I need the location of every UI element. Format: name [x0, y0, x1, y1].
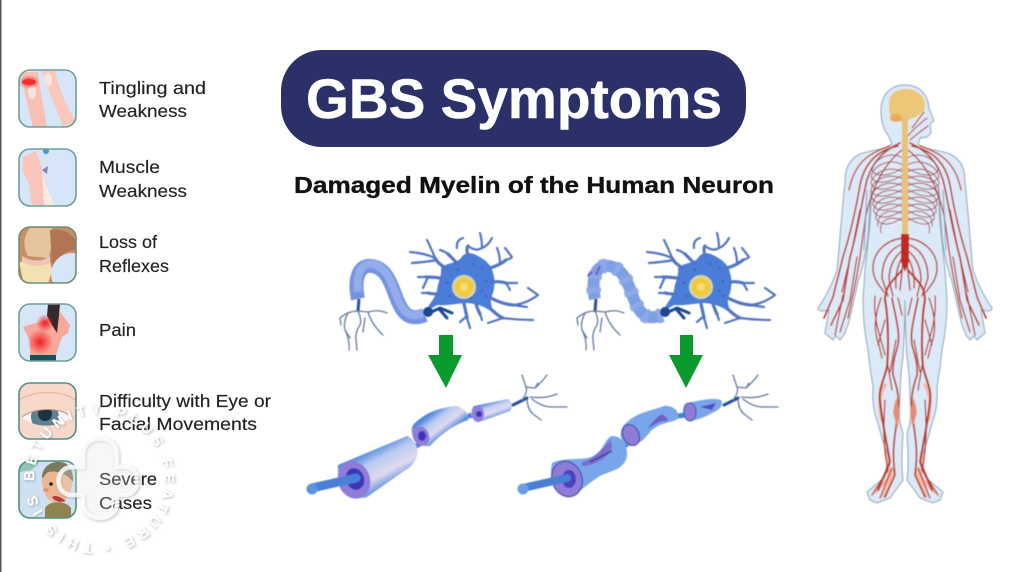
label: Facial Movements [99, 414, 257, 434]
arrow: damaged neuron down [669, 335, 703, 388]
label: Severe [99, 469, 157, 489]
segment 3 [471, 399, 512, 421]
label: Cases [99, 493, 152, 513]
symptom: pain [19, 304, 136, 362]
damaged segment 3 [683, 399, 722, 421]
icon: man with drooping face [19, 461, 76, 518]
symptom: muscle weakness [19, 148, 187, 206]
arrow: healthy neuron down [428, 335, 462, 388]
watermark ring text: THIS IS BETUNITY PLUS FEATURE • [24, 404, 176, 556]
label: Tingling and [99, 78, 206, 98]
subtitle: Damaged Myelin of the Human Neuron [294, 172, 774, 198]
label: Muscle [99, 157, 160, 177]
neuron: damaged [577, 233, 775, 350]
peripheral nerves: right side [907, 143, 986, 498]
label: Loss of [99, 232, 157, 252]
facial nerves [908, 112, 928, 140]
human nervous system figure [818, 85, 992, 503]
label: Weakness [99, 101, 187, 121]
body silhouette [818, 85, 992, 503]
symptom: tingling and weakness [18, 70, 206, 127]
peripheral nerves: left side [824, 143, 903, 498]
myelinated axon [357, 266, 425, 317]
label: Reflexes [99, 256, 169, 276]
spinal cord [902, 118, 908, 234]
axon: damaged myelin [518, 375, 778, 501]
symptom: eye or facial movements [19, 383, 271, 439]
icon: eye [19, 383, 76, 439]
title: GBS Symptoms [306, 67, 722, 130]
label: Weakness [99, 181, 187, 201]
damaged segment 1 [551, 436, 627, 496]
icon: legs with red knee [18, 70, 76, 127]
segment 2 [412, 406, 468, 446]
symptom: loss of reflexes [18, 226, 168, 284]
icon: body with muscle [19, 148, 76, 206]
label: Difficulty with Eye or [99, 391, 271, 411]
icon: back pain [19, 304, 76, 362]
damaged axon [594, 266, 662, 317]
axon: intact myelin [306, 375, 567, 503]
brain [889, 89, 925, 122]
watermark cross [58, 438, 138, 518]
title banner [281, 50, 746, 147]
cauda equina [901, 234, 909, 272]
icon: knee joint [20, 228, 76, 282]
label: Pain [99, 320, 136, 340]
segment 1 [338, 436, 418, 498]
symptom: severe cases [19, 461, 157, 518]
damaged segment 2 [621, 406, 678, 446]
neuron: healthy [340, 233, 538, 350]
watermark [24, 404, 176, 556]
